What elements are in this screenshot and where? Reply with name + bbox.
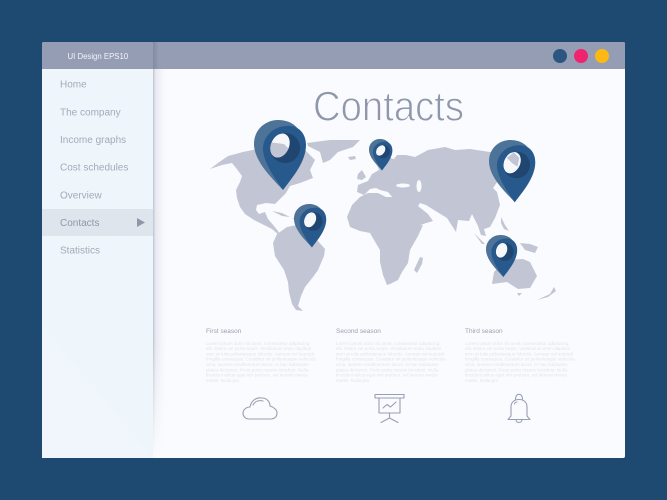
text block: third season (465, 328, 575, 383)
window dots (553, 49, 609, 63)
New Guinea (520, 243, 538, 253)
UK (357, 170, 366, 180)
menu items: Home (60, 80, 87, 90)
text block: third season: tincidunt tellus eget nisi pretium, vel laoreet metus (465, 373, 567, 378)
text block: second season: sem at iulis pellentesque lobortis. Aenean vel suscipit (336, 351, 445, 356)
text block: first season: elit. Etiam vel porta turpis. Vestibulum enim dapibus (206, 346, 312, 351)
text block: third season: sem at iulis pellentesque lobortis. Aenean vel suscipit (465, 351, 574, 356)
menu items: The company (60, 108, 121, 118)
text block: third season: elit. Etiam vel porta turpis. Vestibulum enim dapibus (465, 346, 571, 351)
text block: third season: Third season (465, 328, 503, 335)
window (42, 42, 625, 458)
pin: Australia (486, 235, 517, 277)
world map (210, 140, 556, 311)
North America (210, 146, 315, 236)
pin: South America (294, 204, 326, 247)
text block: first season: First season (206, 328, 242, 335)
Eurasia (357, 147, 515, 236)
active arrow (137, 218, 145, 227)
pin: Europe (369, 139, 392, 170)
header title: UI Design EPS10 (68, 52, 129, 61)
text block: first season: Lorem ipsum dolor sit amet, consectetur adipiscing (206, 341, 310, 346)
Tasmania (517, 293, 522, 296)
Sumatra (474, 233, 485, 244)
menu items: Contacts (60, 218, 99, 229)
text block: third season: urna, laoreet condimentum lacus. In hac habitasse (465, 362, 568, 367)
menu items (60, 80, 128, 256)
text block: third season: mattis. Nulla pro (465, 378, 499, 383)
Africa (347, 193, 423, 285)
Greenland (307, 140, 360, 163)
text block: third season: fringilla consequat. Curabitur sit pellentesque vehicula (465, 357, 575, 362)
Black Sea (396, 184, 410, 188)
text block: second season: fringilla consequat. Curabitur sit pellentesque vehicula (336, 357, 446, 362)
text block: first season: platea dictumst. Proin porta mauris tincidunt. Nulla (206, 367, 309, 372)
text block: first season (206, 328, 316, 383)
text block: first season: sem at iulis pellentesque lobortis. Aenean vel suscipit (206, 351, 315, 356)
text block: second season: mattis. Nulla pro (336, 378, 370, 383)
menu items: Income graphs (60, 135, 126, 146)
text block: second season: platea dictumst. Proin porta mauris tincidunt. Nulla (336, 367, 439, 372)
Australia (492, 259, 537, 289)
text block: first season: fringilla consequat. Curabitur sit pellentesque vehicula (206, 357, 316, 362)
header bar (42, 42, 625, 69)
text block: second season (336, 328, 446, 383)
icon: bell (508, 394, 530, 422)
Iceland (348, 156, 356, 160)
New Zealand (537, 287, 556, 300)
pin: North America (254, 120, 306, 190)
Madagascar (414, 257, 423, 273)
menu items: Statistics (60, 246, 100, 256)
menu items: Overview (60, 190, 102, 202)
title: Contacts (313, 82, 464, 130)
text block: second season: elit. Etiam vel porta turpis. Vestibulum enim dapibus (336, 346, 442, 351)
text block: second season: Lorem ipsum dolor sit amet, consectetur adipiscing (336, 341, 440, 346)
active row (42, 209, 153, 236)
text block: third season: platea dictumst. Proin porta mauris tincidunt. Nulla (465, 367, 568, 372)
Philippines (501, 217, 509, 231)
South America (273, 225, 325, 311)
sidebar shadow (153, 69, 160, 442)
icon: presentation board (375, 394, 404, 422)
text block: second season: Second season (336, 328, 381, 335)
sidebar panel (42, 69, 153, 458)
Cuba and Caribbean (272, 211, 300, 221)
text block: first season: tincidunt tellus eget nisi pretium, vel laoreet metus (206, 373, 308, 378)
icon: cloud (243, 398, 277, 419)
Caspian Sea (416, 180, 422, 192)
text block: first season: mattis. Nulla pro (206, 378, 240, 383)
text block: third season: Lorem ipsum dolor sit amet, consectetur adipiscing (465, 341, 569, 346)
text block: second season: urna, laoreet condimentum lacus. In hac habitasse (336, 362, 439, 367)
pin: Asia (489, 140, 535, 202)
menu items: Cost schedules (60, 162, 128, 174)
text block: second season: tincidunt tellus eget nisi pretium, vel laoreet metus (336, 373, 438, 378)
text block: first season: urna, laoreet condimentum lacus. In hac habitasse (206, 362, 309, 367)
